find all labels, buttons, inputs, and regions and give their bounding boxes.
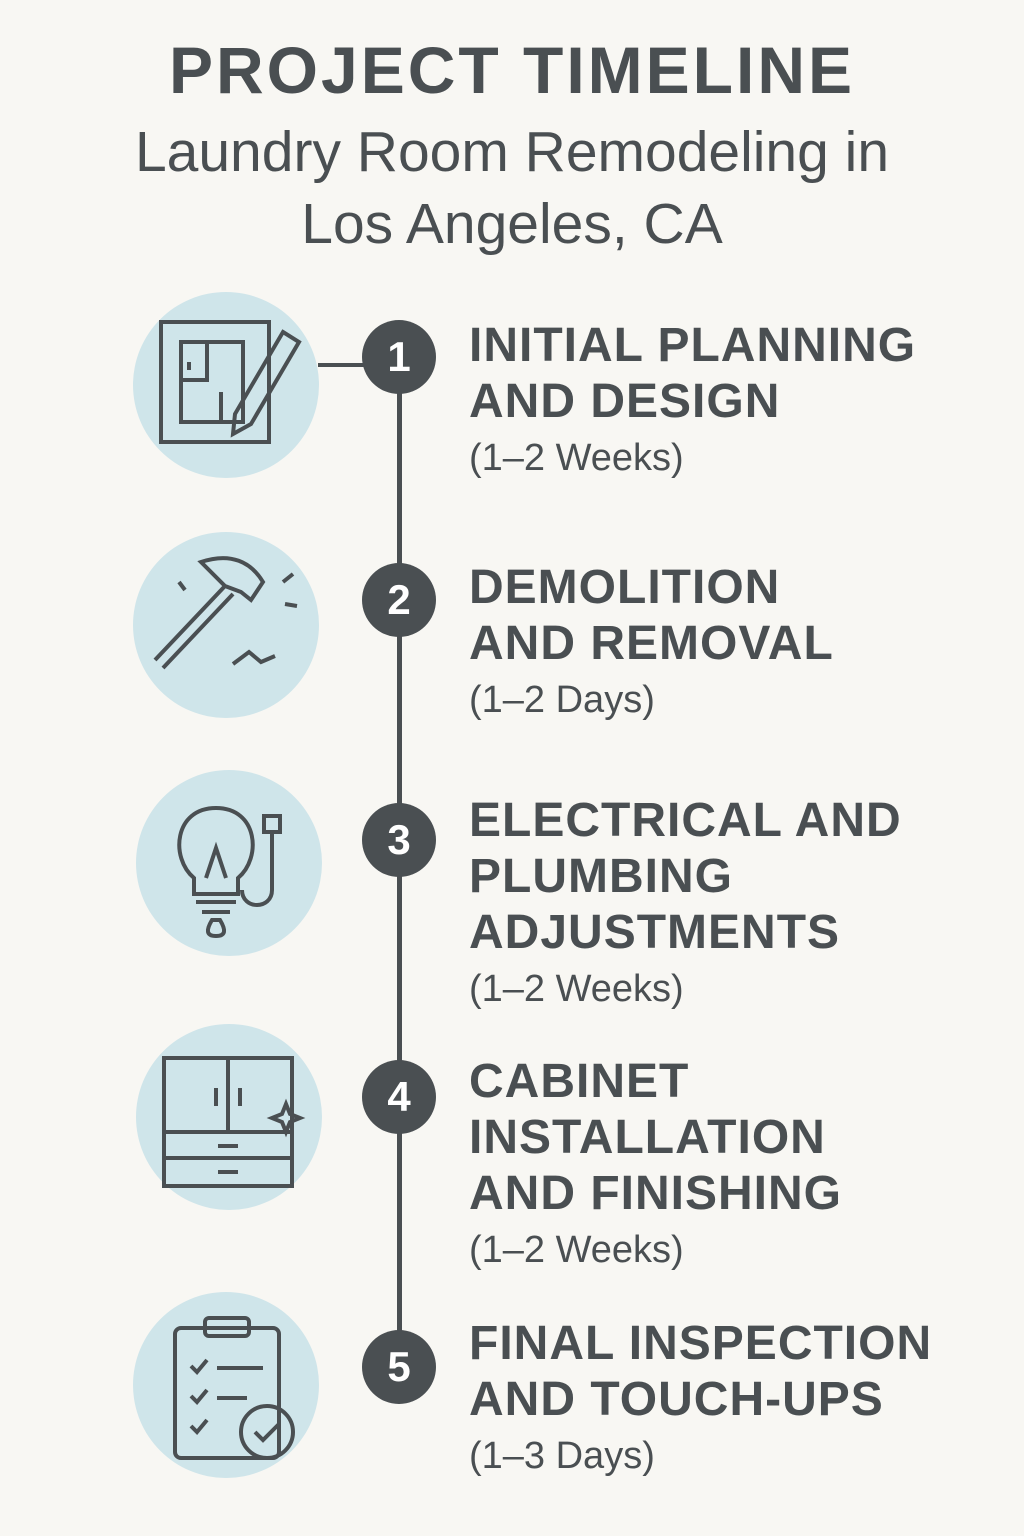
step 2 text: DEMOLITION: [469, 561, 780, 614]
step 5 text: (1–3 Days): [469, 1435, 655, 1477]
title: PROJECT TIMELINE: [169, 33, 855, 107]
subtitle: [135, 120, 889, 256]
step 4 text: AND FINISHING: [469, 1167, 842, 1220]
step 3 text: [469, 794, 902, 1010]
step 2 text: [469, 561, 834, 721]
number 5: 5: [387, 1343, 411, 1390]
icon: cabinet: [136, 1024, 322, 1210]
timeline line: [397, 360, 402, 1370]
number 4: 4: [387, 1073, 411, 1120]
step 2 text: AND REMOVAL: [469, 617, 834, 670]
number 3: 3: [387, 816, 411, 863]
step 1 text: (1–2 Weeks): [469, 437, 684, 479]
step 1 text: [469, 319, 916, 479]
step 2 text: (1–2 Days): [469, 679, 655, 721]
number 5: [362, 1330, 436, 1404]
step 3 text: (1–2 Weeks): [469, 968, 684, 1010]
icon: bulb and pipe: [136, 770, 322, 956]
step 3 text: PLUMBING: [469, 850, 733, 903]
step 1 text: AND DESIGN: [469, 375, 780, 428]
step 4 text: CABINET: [469, 1055, 689, 1108]
icon: hammer: [133, 532, 319, 718]
step 5 text: [469, 1317, 932, 1477]
icon: checklist: [133, 1292, 319, 1478]
number 2: 2: [387, 576, 411, 623]
subtitle: Los Angeles, CA: [301, 192, 723, 256]
number 3: [362, 803, 436, 877]
step 3 text: ELECTRICAL AND: [469, 794, 902, 847]
connector: [318, 363, 368, 367]
icon: blueprint: [133, 292, 319, 478]
step 4 text: INSTALLATION: [469, 1111, 826, 1164]
step 5 text: FINAL INSPECTION: [469, 1317, 932, 1370]
number 2: [362, 563, 436, 637]
number 4: [362, 1060, 436, 1134]
number 1: [362, 320, 436, 394]
step 4 text: [469, 1055, 842, 1271]
number 1: 1: [387, 333, 411, 380]
step 3 text: ADJUSTMENTS: [469, 906, 840, 959]
subtitle: Laundry Room Remodeling in: [135, 120, 889, 184]
step 1 text: INITIAL PLANNING: [469, 319, 916, 372]
step 5 text: AND TOUCH-UPS: [469, 1373, 884, 1426]
step 4 text: (1–2 Weeks): [469, 1229, 684, 1271]
